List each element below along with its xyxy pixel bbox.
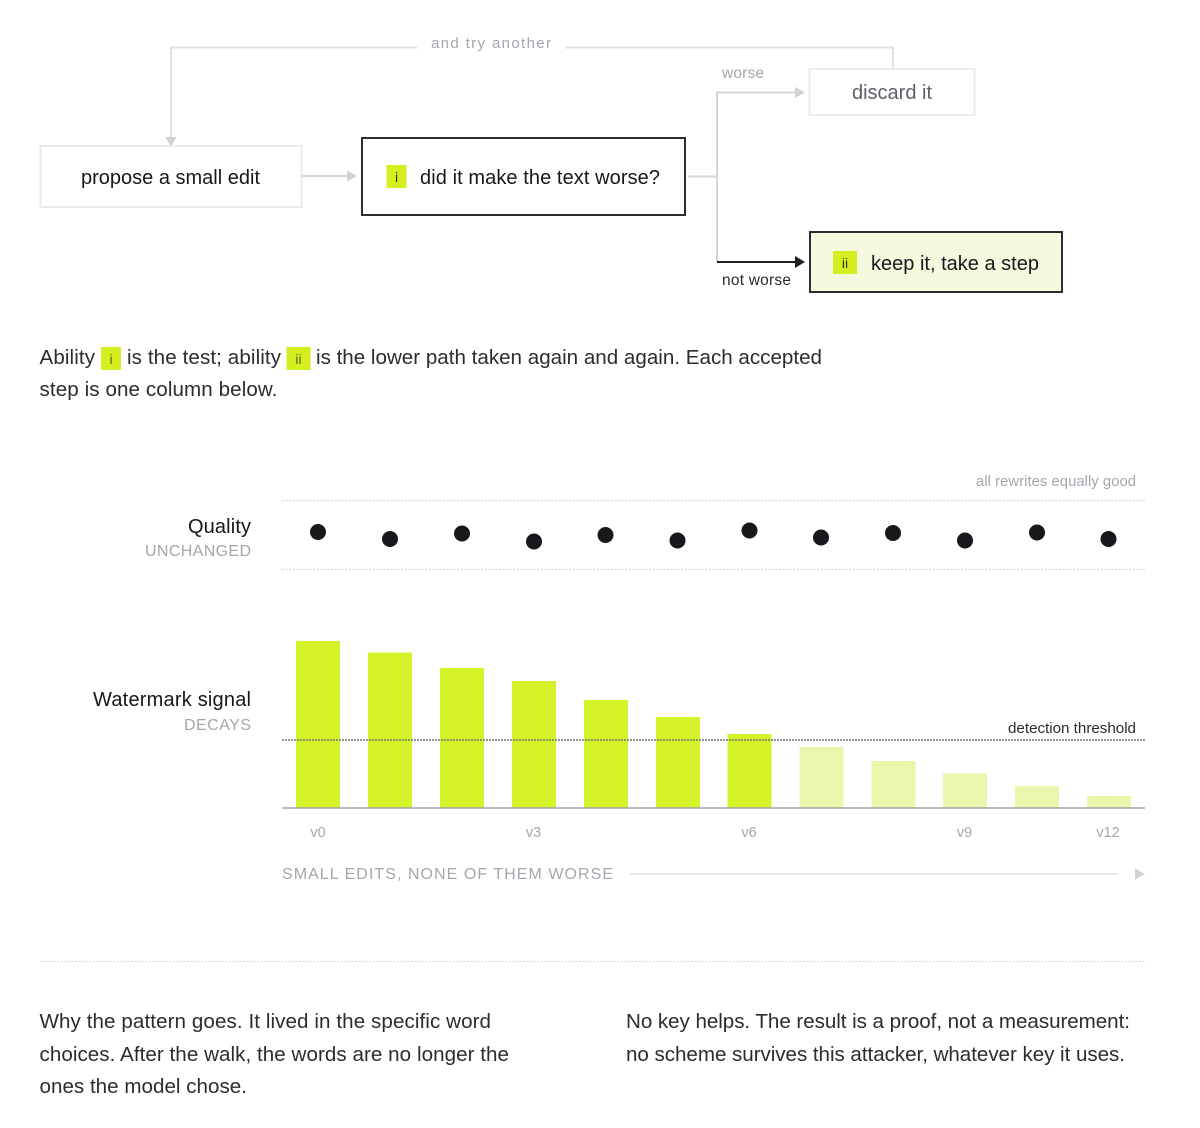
text block: ability explanation: is the test; ability (127, 346, 282, 369)
label: Watermark signal (93, 689, 251, 734)
box: keep it, take a step: keep it, take a step (871, 253, 1039, 275)
text block: no key helps (626, 1010, 1130, 1066)
text block: ability explanation: ii (295, 351, 302, 367)
box: did it make the text worse (362, 138, 685, 215)
box: discard it (810, 69, 974, 115)
box: did it make the text worse: did it make the text worse? (420, 167, 660, 189)
box: propose a small edit (40, 146, 302, 207)
box: discard it: discard it (852, 82, 932, 104)
arrow: progression (630, 868, 1145, 880)
box: keep it, take a step (810, 232, 1062, 292)
quality dots (310, 522, 1116, 550)
text block: ability explanation: is the lower path taken again and again. Each accepted (316, 346, 822, 369)
box: propose a small edit: propose a small edit (81, 167, 260, 189)
arrow: propose to test (302, 170, 357, 182)
annotation: all rewrites equally good: all rewrites equally good (976, 474, 1136, 490)
text block: why the pattern goes: ones the model chose. (40, 1075, 247, 1098)
axis labels: v6 (741, 825, 757, 841)
axis labels (310, 825, 1120, 841)
axis labels: v9 (957, 825, 972, 841)
text block: why the pattern goes: choices. After the walk, the words are no longer the (40, 1043, 509, 1066)
arrow: try another loop (166, 48, 893, 147)
axis labels: v3 (526, 825, 541, 841)
bars: above threshold (296, 641, 772, 808)
arrow: branch to keep (717, 256, 805, 268)
axis caption: SMALL EDITS, NONE OF THEM WORSE (282, 866, 613, 883)
axis labels: v0 (310, 825, 326, 841)
label: Quality (145, 516, 251, 560)
badge: ii: ii (842, 255, 848, 271)
baseline axis (282, 807, 1145, 809)
label: not worse: not worse (722, 272, 791, 289)
text block: no key helps: No key helps. The result is a proof, not a measurement: (626, 1010, 1130, 1033)
label: Quality: Quality (188, 516, 251, 538)
text block: ability explanation: i (109, 351, 113, 367)
label: worse: worse (721, 65, 764, 82)
label: Watermark signal: DECAYS (184, 717, 251, 734)
text block: ability explanation (40, 346, 822, 401)
badge: ii (833, 251, 857, 274)
text block: no key helps: no scheme survives this attacker, whatever key it uses. (626, 1043, 1125, 1066)
label: Watermark signal: Watermark signal (93, 689, 251, 711)
axis labels: v12 (1096, 825, 1120, 841)
flow diagram (40, 35, 1062, 292)
badge: i (386, 165, 406, 188)
text block: why the pattern goes (40, 1010, 509, 1098)
bars: below threshold (800, 747, 1131, 808)
badge: i: i (395, 169, 398, 185)
label: Quality: UNCHANGED (145, 543, 251, 560)
text block: ability explanation: Ability (40, 346, 96, 369)
label: and try another: and try another (431, 35, 551, 52)
label: detection threshold: detection threshold (1008, 720, 1136, 737)
chart: quality and watermark signal (93, 474, 1145, 883)
text block: ability explanation: step is one column below. (40, 378, 278, 401)
arrow: branch connector to discard (688, 87, 805, 262)
detection threshold line (282, 739, 1145, 741)
text block: why the pattern goes: Why the pattern goes. It lived in the specific word (40, 1010, 491, 1033)
